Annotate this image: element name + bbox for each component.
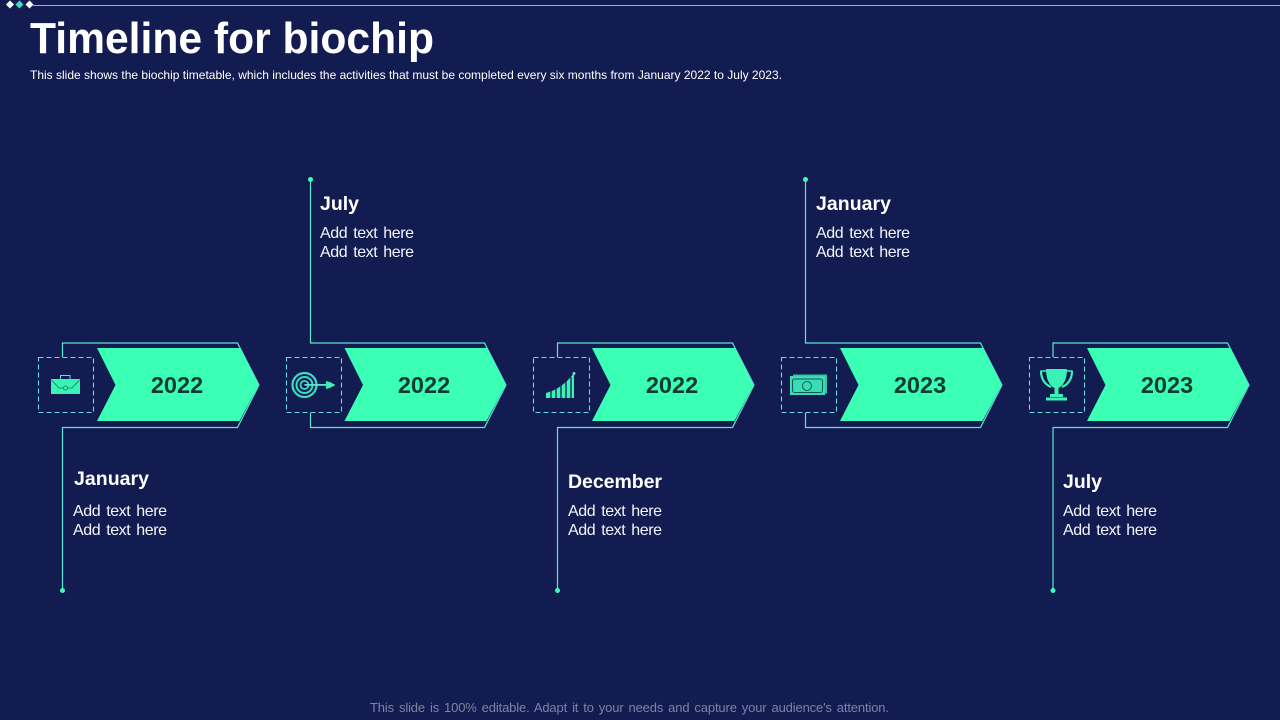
step 2: July 2022 xyxy=(286,177,506,428)
chevron xyxy=(1087,348,1248,421)
body text line 2: Add text here xyxy=(816,244,910,261)
dashed icon box xyxy=(782,358,836,412)
year: 2023 xyxy=(894,372,946,398)
connector outline xyxy=(806,179,1002,428)
end dot xyxy=(60,588,65,593)
connector outline xyxy=(558,343,754,590)
connector outline xyxy=(310,179,506,428)
body text: Add text here xyxy=(320,225,414,242)
body text line 2: Add text here xyxy=(320,244,414,261)
chevron xyxy=(592,348,754,421)
year: 2022 xyxy=(398,372,450,398)
month heading: July xyxy=(1063,471,1102,493)
dashed icon box xyxy=(534,358,590,412)
body text line 2: Add text here xyxy=(1063,522,1157,539)
end dot xyxy=(555,588,560,593)
body text line 2: Add text here xyxy=(73,522,167,539)
dashed icon box xyxy=(38,358,94,412)
body text: Add text here xyxy=(1063,503,1157,520)
year: 2022 xyxy=(646,372,698,398)
title: Timeline for biochip xyxy=(30,14,434,63)
subtitle: This slide shows the biochip timetable, which includes the activities that must be completed every six months from January 2022 to July 2023. xyxy=(30,68,782,82)
year: 2022 xyxy=(151,372,203,398)
month heading: July xyxy=(320,193,359,215)
body text line 2: Add text here xyxy=(568,522,662,539)
icon: trophy xyxy=(1040,369,1072,400)
month heading: December xyxy=(568,471,662,493)
dashed icon box xyxy=(1030,358,1084,412)
icon: target and dart xyxy=(292,373,335,397)
icon: rising bars xyxy=(546,372,576,398)
step 5: July 2023 xyxy=(1030,343,1249,593)
chevron xyxy=(97,348,258,421)
end dot xyxy=(803,177,808,182)
step 4: January 2023 xyxy=(782,177,1002,428)
chevron xyxy=(344,348,506,421)
connector outline xyxy=(62,343,259,590)
end dot xyxy=(1050,588,1056,593)
connector outline xyxy=(1053,343,1249,590)
year: 2023 xyxy=(1141,372,1193,398)
icon: briefcase xyxy=(51,376,80,394)
month heading: January xyxy=(74,468,149,490)
step 1: January 2022 xyxy=(38,343,259,593)
body text: Add text here xyxy=(568,503,662,520)
footer note: This slide is 100% editable. Adapt it to your needs and capture your audience's attention. xyxy=(370,700,889,715)
chevron xyxy=(840,348,1002,421)
top decoration: diamonds and rule xyxy=(6,0,1280,8)
body text: Add text here xyxy=(73,503,167,520)
month heading: January xyxy=(816,193,891,215)
step 3: December 2022 xyxy=(534,343,754,593)
dashed icon box xyxy=(286,358,342,412)
icon: banknotes xyxy=(790,374,827,395)
body text: Add text here xyxy=(816,225,910,242)
end dot xyxy=(308,177,313,182)
